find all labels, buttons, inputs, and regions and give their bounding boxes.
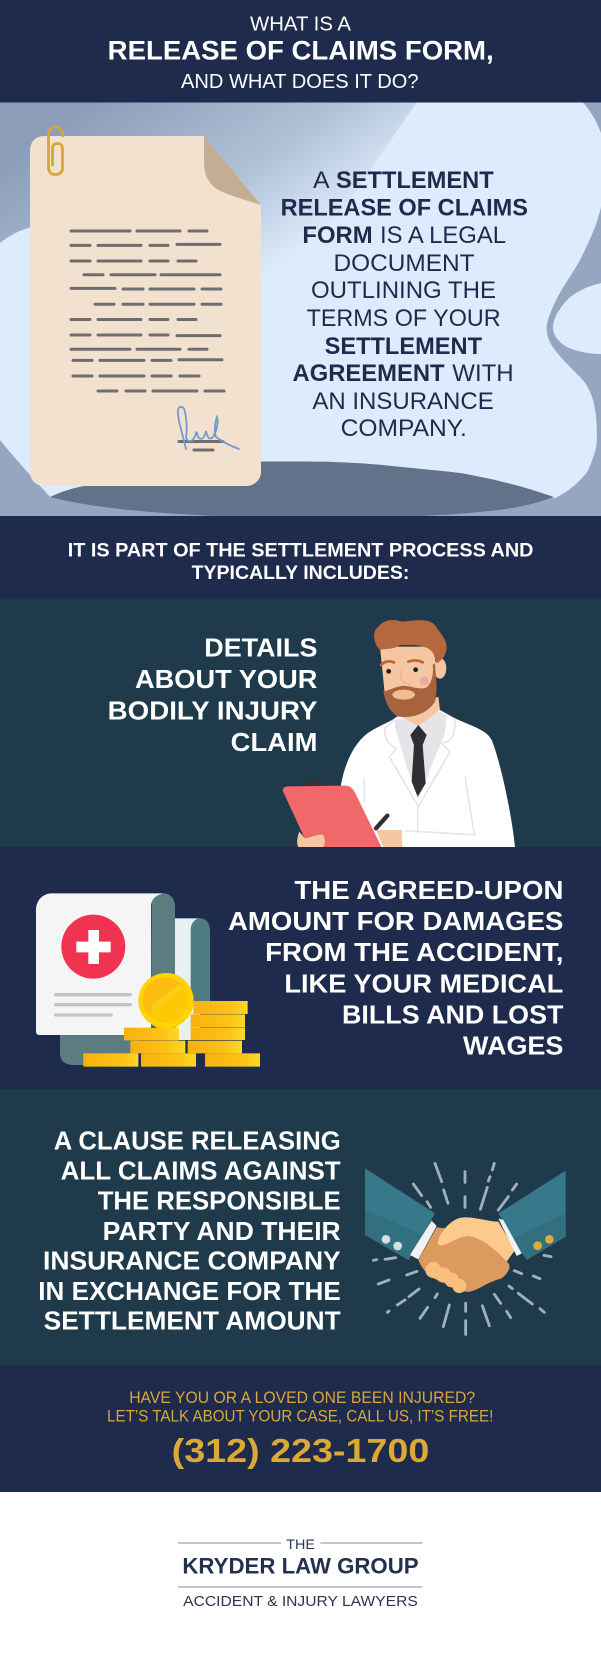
panel: call to action: LET’S TALK ABOUT YOUR CASE, CALL US, IT’S FREE!: [107, 1408, 493, 1426]
footer: logo: KRYDER LAW GROUP: [182, 1554, 419, 1579]
text: clause: SETTLEMENT AMOUNT: [44, 1306, 341, 1336]
header: title: AND WHAT DOES IT DO?: [181, 71, 418, 93]
text: definition: IS A LEGAL: [380, 222, 506, 249]
text: definition: COMPANY.: [341, 415, 467, 442]
text: definition: OUTLINING THE: [311, 277, 496, 304]
text: clause: A CLAUSE RELEASING: [54, 1126, 341, 1156]
text: definition: DOCUMENT: [334, 250, 475, 277]
band: intro to list: IT IS PART OF THE SETTLEMENT PROCESS AND: [68, 540, 534, 561]
text: clause: INSURANCE COMPANY: [43, 1246, 341, 1276]
text: definition: AN INSURANCE: [312, 388, 494, 415]
blob: right side: [553, 283, 601, 354]
text: definition: RELEASE OF CLAIMS: [281, 195, 528, 222]
panel: release clause: [0, 1089, 601, 1365]
text: clause: [38, 1126, 341, 1336]
panel: call to action: [0, 1365, 601, 1492]
text: definition: WITH: [452, 360, 514, 387]
text: definition: A: [313, 167, 330, 194]
text: amount: BILLS AND LOST: [342, 1000, 564, 1030]
footer: logo: [0, 1492, 601, 1656]
text: amount: [228, 875, 564, 1060]
text: amount: LIKE YOUR MEDICAL: [284, 969, 564, 999]
text: definition: TERMS OF YOUR: [307, 305, 501, 332]
text: amount: AMOUNT FOR DAMAGES: [228, 906, 563, 936]
icon: signature: [178, 407, 239, 449]
icon: doctor with clipboard: [283, 620, 515, 847]
text: details: DETAILS: [204, 633, 317, 663]
text: clause: PARTY AND THEIR: [103, 1216, 341, 1246]
band: intro to list: [0, 516, 601, 599]
text: details: BODILY INJURY: [108, 695, 317, 725]
text: amount: FROM THE ACCIDENT,: [265, 937, 563, 967]
text: details: CLAIM: [231, 727, 317, 757]
panel: bodily injury details: [0, 599, 601, 847]
text: definition: AGREEMENT: [292, 360, 445, 387]
icon: document: [30, 127, 261, 486]
text: details: [108, 633, 318, 757]
panel: agreed-upon amount: [0, 847, 601, 1089]
header: title: WHAT IS A: [250, 13, 352, 35]
icon: medical bills and coins: [36, 893, 260, 1067]
icon: paperclip: [48, 127, 63, 174]
header: title: [0, 0, 601, 103]
text: clause: ALL CLAIMS AGAINST: [61, 1156, 341, 1186]
icon: handshake: [365, 1163, 566, 1334]
panel: definition: [0, 102, 601, 517]
text: definition: SETTLEMENT: [336, 167, 494, 194]
panel: call to action: HAVE YOU OR A LOVED ONE BEEN INJURED?: [129, 1389, 475, 1407]
text: amount: WAGES: [463, 1030, 563, 1060]
footer: logo: THE: [286, 1537, 315, 1552]
text: clause: IN EXCHANGE FOR THE: [38, 1276, 341, 1306]
text: definition: SETTLEMENT: [325, 333, 482, 360]
text: definition: [281, 167, 528, 442]
band: intro to list: TYPICALLY INCLUDES:: [192, 563, 409, 584]
ground shadow: [50, 462, 554, 517]
phone number: (312) 223-1700: [172, 1432, 429, 1469]
footer: logo: ACCIDENT & INJURY LAWYERS: [183, 1593, 418, 1610]
text: details: ABOUT YOUR: [135, 664, 318, 694]
text: definition: FORM: [302, 222, 373, 249]
header: title: RELEASE OF CLAIMS FORM,: [108, 36, 494, 66]
text: clause: THE RESPONSIBLE: [98, 1186, 341, 1216]
text: amount: THE AGREED-UPON: [294, 875, 563, 905]
